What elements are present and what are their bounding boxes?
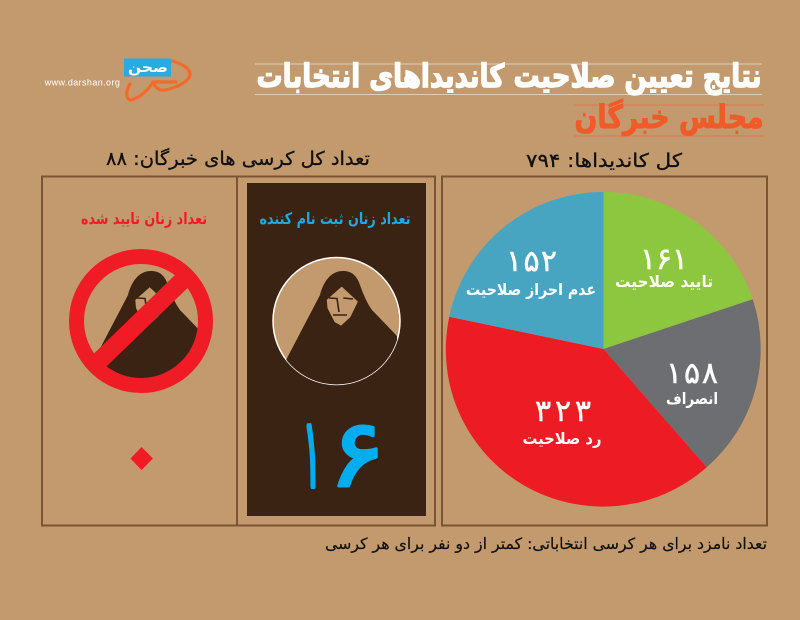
footnote: تعداد نامزد برای هر کرسی انتخاباتی: کمتر از دو نفر برای هر کرسی — [325, 535, 767, 554]
subtitle: مجلس خبرگان — [574, 98, 764, 136]
heading: total candidates: کل کاندیداها: ۷۹۴ — [526, 150, 683, 172]
slice: withdrawn: ۱۵۸ — [666, 356, 718, 391]
slice: not qualified: ۱۵۲ — [506, 244, 557, 279]
slice: not qualified: عدم احراز صلاحیت — [466, 280, 596, 299]
big number 16 — [303, 400, 386, 509]
slice: withdrawn: انصراف — [666, 389, 718, 408]
panel: approved women — [76, 209, 208, 470]
panel: registered women — [247, 183, 426, 516]
big number 16: ۶ — [328, 400, 386, 509]
zero marker — [130, 447, 153, 470]
panel: candidates pie frame — [442, 176, 767, 526]
slice: not qualified — [449, 192, 604, 349]
pie chart — [446, 192, 761, 507]
big number 16: ۱ — [303, 400, 321, 509]
slice: withdrawn — [604, 299, 761, 467]
panel: women seats frame — [42, 176, 435, 526]
slice: approved — [604, 192, 753, 349]
slice: rejected: ۳۲۳ — [535, 394, 591, 429]
slice: rejected — [446, 317, 707, 507]
logo blue box: صحن — [128, 60, 168, 76]
approved label: تعداد زنان تایید شده — [81, 209, 207, 228]
slice: approved: ۱۶۱ — [640, 242, 688, 277]
logo url text: www.darshan.org — [44, 78, 120, 88]
icon: woman in circle — [273, 258, 400, 400]
slice: approved: تایید صلاحیت — [615, 272, 713, 291]
registered label: تعداد زنان ثبت نام کننده — [260, 209, 410, 228]
logo blue box — [124, 58, 171, 76]
logo orange swoosh — [127, 61, 190, 100]
slice: rejected: رد صلاحیت — [522, 429, 602, 448]
heading: total seats: تعداد کل کرسی های خبرگان: ۸۸ — [106, 147, 370, 170]
icon: prohibited woman — [76, 256, 208, 400]
logo: darshan — [44, 58, 190, 100]
